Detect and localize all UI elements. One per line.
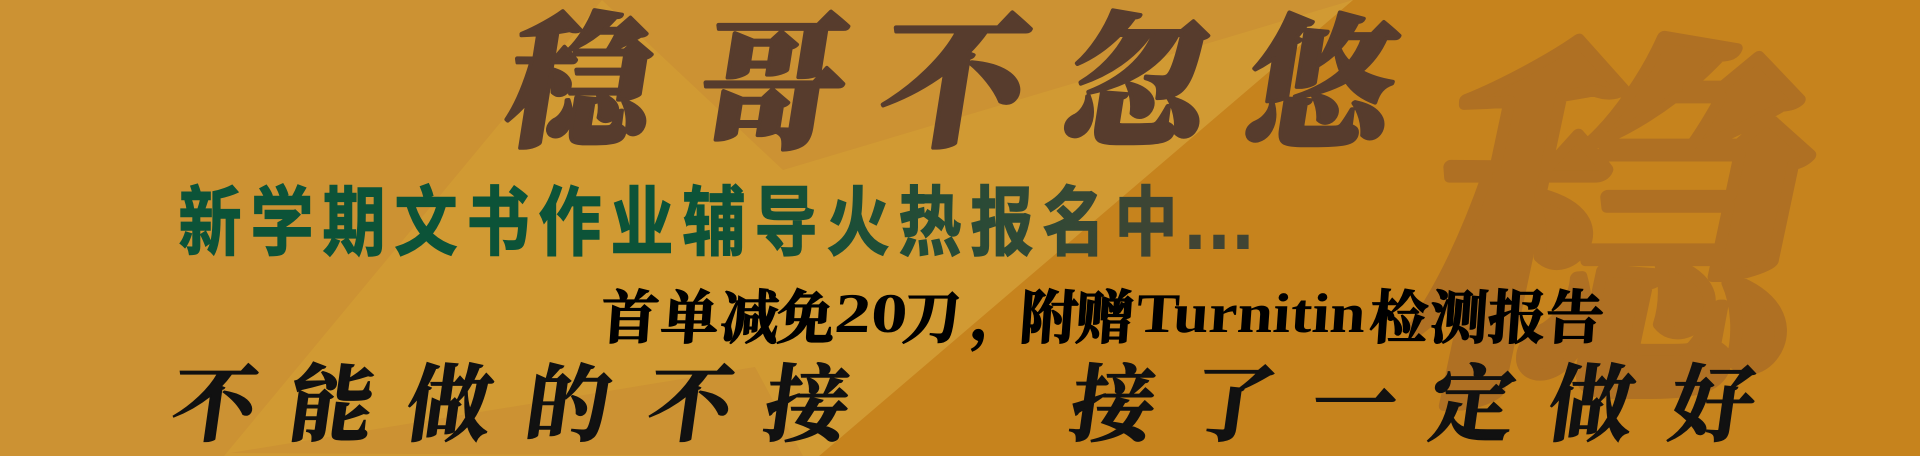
offer line [598, 283, 1606, 352]
offer text: unit and gift: 刀，附赠 [900, 286, 1136, 352]
slogan: 不能做的不接 接了一定做好 [166, 360, 1761, 453]
offer text: amount: 20 [832, 283, 910, 345]
offer text: Turnitin: Turnitin [1134, 283, 1368, 345]
title: 稳哥不忽悠 [496, 7, 1419, 168]
watermark character: 稳 [1379, 26, 1891, 452]
offer text: report: 检测报告 [1368, 286, 1606, 351]
offer text: discount: 首单减免 [599, 286, 837, 351]
green headline: 新学期文书作业辅导火热报名中... [178, 162, 1254, 270]
